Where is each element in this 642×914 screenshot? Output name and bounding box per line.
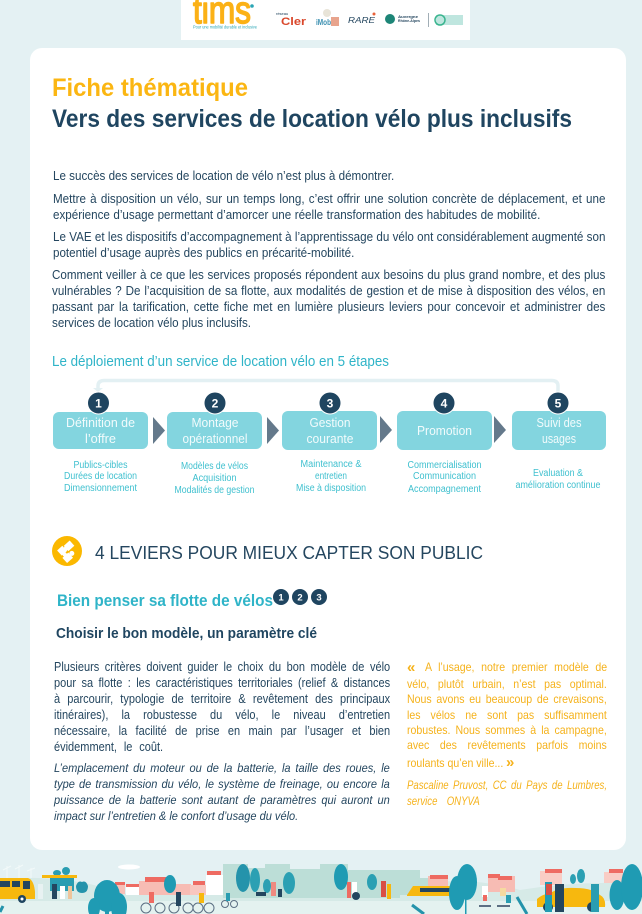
italic text left: puissance de la batterie sont autant de paramètres qui auront un xyxy=(54,793,390,807)
step 5 xyxy=(512,392,606,450)
step 3: Gestion xyxy=(310,415,350,430)
step 1: Définition de xyxy=(66,415,135,430)
tree xyxy=(76,882,88,899)
intro text block: Le succès des services de location de vélo n’est plus à démontrer. xyxy=(53,169,394,183)
scooter riders xyxy=(479,886,511,906)
section header: 4 leviers xyxy=(52,536,483,566)
subheading: modèle: Choisir le bon modèle, un paramètre clé xyxy=(56,626,317,642)
quote text: A l’usage, notre premier modèle de xyxy=(425,660,607,674)
right trees xyxy=(610,864,642,910)
step 5 details: Evaluation & xyxy=(533,468,583,479)
arrow 2 xyxy=(267,417,279,444)
step 1 details: Publics-cibles xyxy=(74,460,128,471)
partner logo: Auvergne-Rhône-Alpes: Auvergne xyxy=(398,15,418,19)
intro text block xyxy=(52,169,605,330)
step badges: 2 xyxy=(297,592,303,604)
step 2 xyxy=(167,392,262,449)
quote marks xyxy=(407,659,514,771)
partner logo: CEE xyxy=(435,15,463,25)
subheading: flotte: Bien penser sa flotte de vélos xyxy=(57,591,273,610)
title line 2: Vers des services de location vélo plus inclusifs xyxy=(52,105,572,133)
footer illustration xyxy=(0,864,642,914)
town houses right xyxy=(488,869,623,892)
partner logo: Cler xyxy=(276,11,307,28)
intro text block: expérience d’usage permettant d’amorcer une réelle transformation des habitudes de mobilité. xyxy=(53,208,540,222)
quote text: robustes. Nous sommes à la campagne, xyxy=(407,723,607,737)
process diagram xyxy=(53,380,606,496)
step 3 details: Mise à disposition xyxy=(296,483,366,494)
heading: 5 steps: Le déploiement d’un service de location vélo en 5 étapes xyxy=(52,354,389,370)
step 2: opérationnel xyxy=(182,431,248,446)
partner logo: Auvergne-Rhône-Alpes: Rhône-Alpes xyxy=(398,19,420,23)
partner logo: iMob xyxy=(316,9,339,27)
step badges: 1 xyxy=(278,592,284,604)
step 2: Montage xyxy=(192,415,238,430)
partner logo: RARE xyxy=(348,12,376,25)
bus shelter with people xyxy=(38,867,77,899)
logo tagline: Pour une mobilité durable et inclusive xyxy=(193,24,257,30)
park trees and family xyxy=(236,864,295,897)
intro text block: services de location vélo plus inclusifs. xyxy=(52,316,251,330)
step 4: Promotion xyxy=(417,423,472,438)
italic text left: impact sur l’entretien & le confort d’usage du vélo. xyxy=(54,809,298,823)
feedback loop arrow xyxy=(93,380,558,394)
step 3 xyxy=(282,392,377,450)
yellow car with people xyxy=(537,882,605,912)
intro text block: potentiel d’usage auprès des publics en précarité-mobilité. xyxy=(53,246,354,260)
quote text: roulants qu’en ville... xyxy=(407,756,503,770)
step 3 details: entretien xyxy=(315,471,347,482)
cyclists xyxy=(141,892,238,913)
step 5 details: amélioration continue xyxy=(516,480,601,491)
step 4 details: Accompagnement xyxy=(408,484,481,495)
quote text xyxy=(407,660,607,770)
train xyxy=(407,875,450,896)
tall trees xyxy=(449,864,477,914)
title xyxy=(52,74,572,133)
cloud xyxy=(118,864,140,870)
body text left: Plusieurs critères doivent guider le choix du bon modèle de vélo xyxy=(54,660,390,674)
city blocks xyxy=(223,864,428,898)
icon: puzzle xyxy=(52,536,82,566)
step 4: 4 xyxy=(441,396,448,410)
body text left: itinéraires), la robustesse du vélo, le niveau d’entretien xyxy=(54,708,390,722)
body text left: à parcourir, typologie de territoire & revêtement des principaux xyxy=(54,692,390,706)
people and wheelchair xyxy=(334,864,391,900)
partner logo: Cler: Cler xyxy=(281,16,307,28)
step 3 details: Maintenance & xyxy=(300,459,362,470)
step 5: Suivi des xyxy=(536,415,582,430)
body text left: nécessaire, la facilité de prise en main par l’usager et bien xyxy=(54,724,390,738)
partner logo: iMob: iMob xyxy=(316,17,331,27)
quote text: les vélos ne sont pas suffisamment xyxy=(407,708,607,722)
step 2 details: Acquisition xyxy=(192,473,236,484)
arrow 1 xyxy=(153,417,165,444)
step 3: courante xyxy=(306,431,354,446)
ground and hills xyxy=(0,878,642,914)
body text left: pour sa flotte : les caractéristiques territoriales (relief & distances xyxy=(54,676,390,690)
title line 1: Fiche thématique xyxy=(52,74,248,102)
partner logo: Cler: réseau xyxy=(276,11,288,16)
bus xyxy=(0,878,35,903)
intro text block: vulnérables ? De l’acquisition de sa flotte, aux modalités de gestion et de mise à disposition des vélos, en xyxy=(52,284,605,298)
step 2 details xyxy=(174,461,254,496)
italic text left: L’emplacement du moteur ou de la batterie, la taille des roues, le xyxy=(54,761,390,775)
section title: 4 LEVIERS POUR MIEUX CAPTER SON PUBLIC xyxy=(95,542,483,563)
step badges: 3 xyxy=(316,592,322,604)
big trees xyxy=(88,880,127,914)
italic text left: type de transmission du vélo, le système de freinage, ou encore la xyxy=(54,777,390,791)
step 1 xyxy=(53,392,148,449)
header logo band xyxy=(181,0,470,40)
quote attribution: service ONYVA xyxy=(407,794,480,808)
step 4 details xyxy=(408,460,482,495)
intro text block: passant par la tarification, cette fiche met en lumière plusieurs leviers pour concevoir et administrer des xyxy=(52,300,605,314)
intro text block: Le VAE et les dispositifs d’accompagnement à l’apprentissage du vélo ont considérablement augmenté son xyxy=(53,230,605,244)
partner logo: RARE: RARE xyxy=(348,15,375,25)
intro text block: Comment veiller à ce que les services proposés répondent aux besoins du plus grand nombre, et des plus xyxy=(52,268,605,282)
foreground plants xyxy=(0,897,527,914)
quote text: vélo, plutôt urbain, n’est pas optimal. xyxy=(407,677,607,691)
quote text: avec des revêtements parfois moins xyxy=(407,738,607,752)
quote marks: » xyxy=(506,754,514,771)
step 2 details: Modèles de vélos xyxy=(181,461,248,472)
body text left xyxy=(54,660,390,754)
step badges xyxy=(273,589,327,605)
arrow 4 xyxy=(494,416,506,443)
quote text: Nous avons eu beaucoup de crevaisons, xyxy=(407,692,607,706)
body text left: évidemment, le coût. xyxy=(54,740,163,754)
step 5 details xyxy=(516,468,601,491)
step 5: usages xyxy=(542,431,576,446)
step 1: 1 xyxy=(95,396,102,410)
quote attribution: Pascaline Pruvost, CC du Pays de Lumbres, xyxy=(407,778,607,792)
step 3 details xyxy=(296,459,366,494)
step 1: l’offre xyxy=(85,431,116,446)
partner logo: Auvergne-Rhône-Alpes xyxy=(385,14,420,24)
town houses xyxy=(115,871,223,895)
step 5: 5 xyxy=(555,396,562,410)
step 4 details: Commercialisation xyxy=(408,460,482,471)
step 3: 3 xyxy=(327,396,334,410)
italic text left xyxy=(54,761,390,823)
step 1 details: Dimensionnement xyxy=(64,483,137,494)
quote attribution xyxy=(407,778,607,808)
wind turbines xyxy=(3,865,35,878)
step 2: 2 xyxy=(212,396,219,410)
intro text block: Mettre à disposition un vélo, sur un temps long, c’est offrir une solution concrète de déplacement, et une xyxy=(53,192,605,206)
step 1 details xyxy=(64,460,137,494)
step 1 details: Durées de location xyxy=(64,471,137,482)
step 2 details: Modalités de gestion xyxy=(174,485,254,496)
quote marks: « xyxy=(407,659,415,676)
step 4 details: Communication xyxy=(413,471,476,482)
arrow 3 xyxy=(380,416,392,443)
step 4 xyxy=(397,392,492,450)
